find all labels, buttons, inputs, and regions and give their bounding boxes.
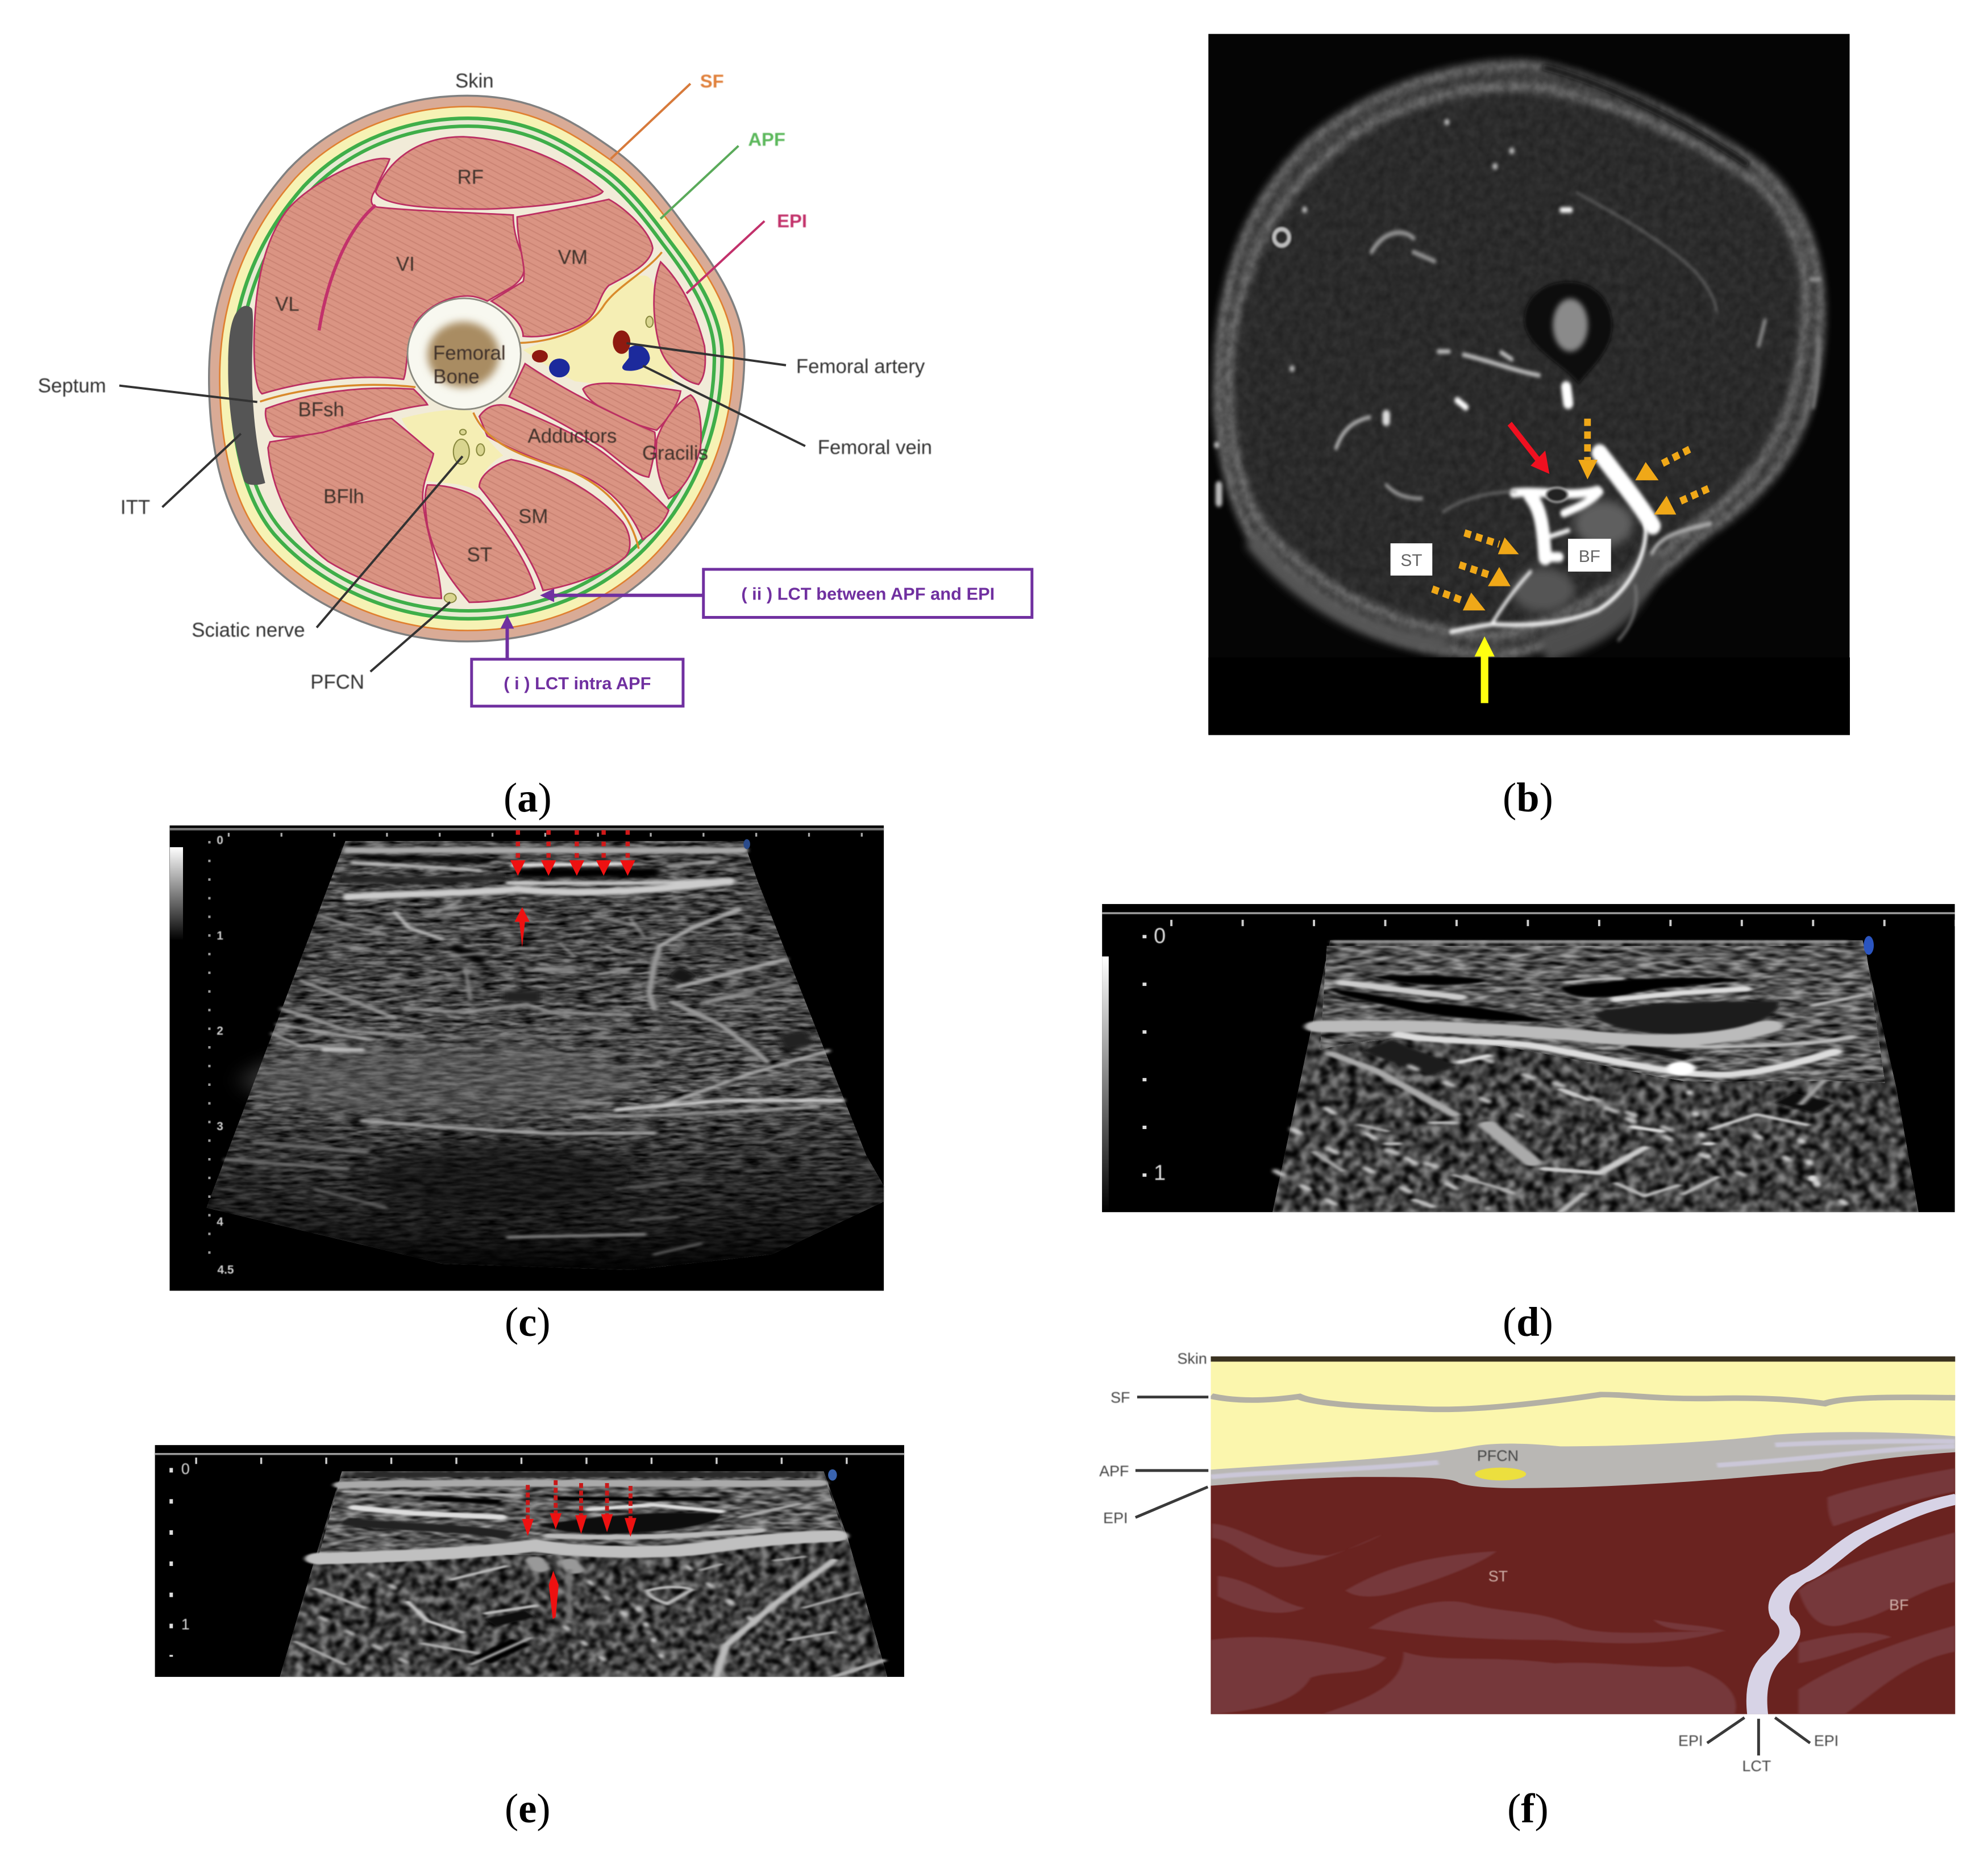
labels: VL: [275, 293, 300, 315]
labels: EPI: [777, 210, 807, 231]
muscles: [254, 137, 705, 602]
depth labels c: 0: [217, 834, 223, 847]
biceps mottled region: [1574, 501, 1633, 547]
skin line: [1211, 1356, 1955, 1361]
labels: Gracilis: [642, 442, 708, 464]
MRI background: [1208, 34, 1850, 734]
labels: VM: [558, 247, 588, 269]
panel f: longitudinal schematic: [1099, 1350, 1958, 1775]
central vessel: [1546, 488, 1568, 502]
ultrasound d content: [1102, 913, 1955, 1212]
fat and fascia bright core: [1514, 453, 1653, 558]
depth ticks: [208, 841, 211, 1267]
depth labels d: 0: [1154, 925, 1166, 948]
ultrasound d frame: [1102, 904, 1955, 1212]
depth labels e: [181, 1460, 190, 1633]
dark rim line: [1543, 67, 1748, 165]
panel e: ultrasound image: [155, 1445, 904, 1677]
femoral vein: [622, 345, 650, 371]
upper tissue zone: [318, 1479, 846, 1560]
callout i: LCT intra APF: ( i ) LCT intra APF: [504, 673, 651, 693]
labels: Skin: [1178, 1350, 1207, 1367]
panel a: thigh cross-section diagram: [38, 70, 1032, 706]
aponeurotic fascia: [1211, 1432, 1955, 1489]
callout i: LCT intra APF: [472, 615, 683, 706]
depth tick dots: [169, 1468, 173, 1657]
red arrow: [1509, 424, 1549, 474]
labels: Bone: [433, 366, 480, 388]
depth labels d: 1: [1154, 1161, 1166, 1185]
depth labels c: 4: [217, 1215, 223, 1229]
labels: Adductors: [528, 425, 617, 447]
red upward arrow: [549, 1571, 559, 1619]
dark subcutaneous bands: [339, 857, 809, 1043]
ultrasound e content: [155, 1454, 904, 1677]
labels: Skin: [455, 70, 494, 92]
labels: ST: [1488, 1568, 1508, 1585]
labels: [38, 70, 932, 693]
bright speckle rows: [320, 1566, 760, 1672]
VL-VI internal septum: [319, 205, 376, 330]
lower black strip: [1208, 657, 1850, 735]
orientation dot: [743, 839, 750, 849]
labels: APF: [748, 129, 785, 150]
subcutaneous fat: [1211, 1359, 1955, 1493]
lower-right subcutaneous signal: [1543, 553, 1652, 649]
caption a: (a): [504, 774, 552, 821]
muscle compartment: [1229, 87, 1806, 635]
thigh body signal: [1217, 64, 1821, 656]
muscle: [1211, 1452, 1955, 1714]
upper tissue zone: [1320, 946, 1885, 1083]
caption b: (b): [1503, 774, 1553, 821]
posterior fat zone: [402, 410, 503, 491]
red dashed arrows: [510, 830, 635, 876]
ring vessel: [1274, 229, 1289, 245]
labels: EPI: [1103, 1509, 1128, 1526]
bright fascia: [1315, 942, 1862, 1212]
orientation dot: [828, 1469, 837, 1481]
depth labels c: 3: [217, 1120, 223, 1133]
depth labels c: 2: [217, 1025, 223, 1038]
labels: Femoral vein: [818, 436, 932, 459]
dark pockets: [344, 1475, 804, 1660]
panel b: MRI axial image: [1208, 34, 1850, 735]
depth labels c: [217, 834, 234, 1277]
labels: BF: [1889, 1597, 1909, 1614]
labels: Femoral: [433, 342, 506, 364]
red upward arrow: [515, 907, 530, 947]
specular spot: [1666, 1061, 1695, 1075]
labels: APF: [1099, 1463, 1129, 1480]
labels: PFCN: [1477, 1447, 1519, 1464]
grey scale bar: [1102, 956, 1109, 1212]
dark pockets: [1332, 976, 1823, 1108]
labels: SF: [700, 70, 724, 91]
lighter muscle patches: [1211, 1468, 1955, 1714]
labels: SM: [518, 505, 548, 527]
labels: PFCN: [310, 671, 364, 693]
thigh anatomy drawing: [209, 95, 745, 642]
label ST: [1391, 543, 1432, 576]
depth labels d: [1154, 925, 1166, 1185]
callout ii: LCT between APF and EPI: [540, 569, 1032, 618]
ruler ticks: [228, 831, 866, 838]
depth labels e: 0: [181, 1460, 190, 1477]
BF heterogeneous region: [1512, 568, 1574, 612]
fascia highlight: [1211, 1441, 1955, 1477]
labels: SF: [1111, 1389, 1130, 1406]
grey scale bar: [170, 847, 183, 940]
red dashed arrows: [522, 1480, 637, 1537]
skin layer: [209, 95, 745, 642]
label BF: BF: [1579, 547, 1600, 566]
bright fascia and fine vessels: [1217, 122, 1819, 640]
callout ii: LCT between APF and EPI: ( ii ) LCT between APF and EPI: [741, 584, 995, 604]
depth tick dots: [1142, 935, 1146, 1177]
labels: EPI: [1814, 1732, 1839, 1749]
ultrasound e frame: [155, 1445, 904, 1677]
labels: VI: [396, 253, 415, 276]
sector field: [1272, 940, 1919, 1212]
labels: RF: [458, 166, 484, 188]
leader lines: [1136, 1397, 1810, 1755]
labels: LCT: [1742, 1758, 1771, 1775]
caption d: (d): [1503, 1299, 1553, 1345]
labels: BFlh: [323, 486, 364, 508]
ruler ticks: [195, 1451, 904, 1471]
superficial fascia: [1211, 1394, 1955, 1409]
orange dashed arrows: [1432, 419, 1708, 610]
PFCN nerve: [1475, 1468, 1526, 1480]
haze: [244, 1043, 640, 1118]
panel d: ultrasound image: [1102, 904, 1955, 1212]
deep vessels: [532, 350, 570, 377]
top bar: [170, 827, 884, 831]
sector field: [206, 841, 884, 1270]
aponeurotic fascia inner: [239, 126, 714, 611]
medial fat zone: [523, 276, 675, 385]
deep dark zone: [367, 1143, 630, 1211]
top bar: [155, 1451, 904, 1457]
labels: [1099, 1350, 1909, 1775]
caption e: (e): [505, 1785, 551, 1831]
sector field: [280, 1471, 887, 1677]
orange septa: [260, 252, 662, 549]
labels: Septum: [38, 375, 106, 397]
labels: Sciatic nerve: [192, 619, 305, 641]
schematic drawing: [1211, 1356, 1958, 1715]
superficial fat and fascia: [220, 107, 734, 631]
lateral connective tissue band: [1757, 1499, 1958, 1715]
labels: BFsh: [298, 398, 344, 420]
labels: Femoral artery: [796, 356, 925, 378]
orientation dot: [1864, 936, 1874, 955]
ultrasound c frame: [169, 826, 884, 1291]
bright speckle rows: [1275, 1058, 1852, 1209]
depth labels c: 1: [217, 930, 223, 943]
femoral bone on MRI: [1524, 282, 1612, 385]
MRI anatomy: [1208, 64, 1850, 735]
yellow arrow: [1475, 636, 1495, 703]
label ST: ST: [1400, 551, 1422, 570]
label BF: [1568, 539, 1611, 572]
ruler tick row: [1170, 914, 1955, 931]
iliotibial tract: [228, 306, 265, 485]
leader lines: [119, 84, 805, 672]
depth labels c: 4.5: [217, 1264, 234, 1277]
echogenic lines: [226, 850, 842, 1255]
labels: ST: [467, 544, 492, 566]
lower-left subcutaneous signal: [1250, 540, 1447, 645]
caption f: (f): [1507, 1785, 1549, 1831]
bright fascia: [296, 1483, 883, 1677]
labels: EPI: [1678, 1732, 1703, 1749]
aponeurotic fascia outer: [231, 118, 722, 619]
femoral artery: [613, 330, 630, 354]
femoral bone: [407, 298, 521, 410]
sciatic nerve and small nerves: [444, 317, 653, 603]
panel c: ultrasound image: [169, 826, 884, 1291]
labels: ITT: [120, 496, 150, 518]
top bar: [1102, 910, 1955, 916]
ultrasound c content: [170, 829, 884, 1270]
depth labels e: 1: [181, 1615, 190, 1633]
dark top strip: [1334, 939, 1849, 959]
caption c: (c): [505, 1299, 551, 1345]
